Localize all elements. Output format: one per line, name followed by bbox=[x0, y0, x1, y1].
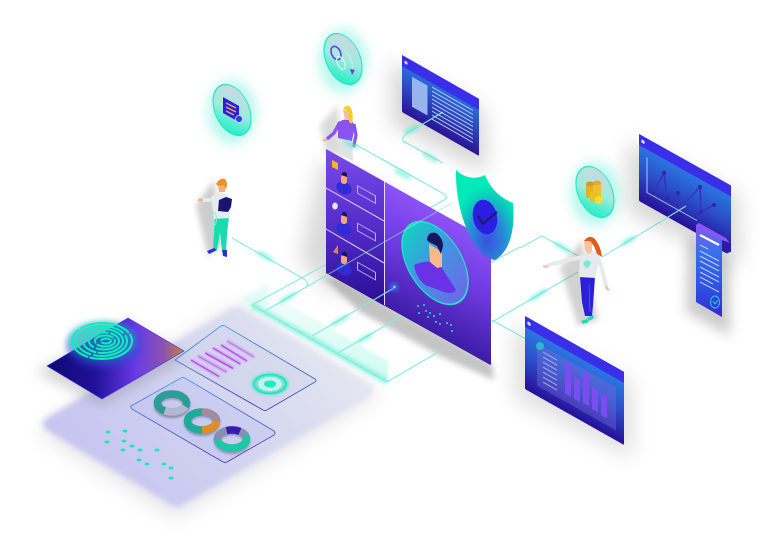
person: man with tablet bbox=[196, 179, 232, 257]
screen: bar chart bbox=[514, 316, 632, 458]
donut 2 bbox=[188, 412, 216, 432]
donut 3 bbox=[218, 430, 246, 450]
person: woman in purple bbox=[320, 105, 356, 161]
connector lines behind panels bbox=[232, 141, 680, 382]
screen: document bbox=[392, 55, 486, 172]
dividers bbox=[326, 181, 384, 305]
left list column bbox=[326, 149, 384, 306]
document receipt bbox=[686, 223, 730, 336]
bar screen node bbox=[536, 342, 544, 350]
glowing base strip bbox=[240, 284, 389, 382]
avatar dots bbox=[417, 304, 453, 332]
screen connector loop bbox=[403, 112, 443, 143]
list row people bbox=[334, 172, 354, 278]
fingerprint plate bbox=[36, 318, 188, 406]
fingerprint bbox=[66, 320, 142, 368]
profile avatar bbox=[402, 208, 468, 318]
bubble: certificate bbox=[208, 77, 256, 144]
soft shadow behind main panel bbox=[300, 160, 494, 380]
card: lines and target bbox=[175, 326, 316, 410]
donut 1 bbox=[158, 394, 186, 414]
bubble: coins bbox=[571, 159, 619, 226]
floor dots bbox=[104, 430, 174, 480]
card: donut charts bbox=[131, 378, 275, 462]
shield bbox=[456, 170, 514, 260]
screen: line chart bbox=[628, 134, 740, 266]
bubble: keys bbox=[319, 26, 367, 93]
connector lines over panel bbox=[312, 158, 452, 336]
person: woman in white bbox=[543, 237, 610, 326]
target bbox=[251, 372, 289, 396]
list row buttons bbox=[358, 186, 376, 280]
connector glow pulses bbox=[258, 126, 635, 342]
purple text lines bbox=[191, 341, 254, 377]
avatar person bbox=[414, 233, 456, 293]
main profile panel bbox=[326, 149, 491, 365]
panel node glow bbox=[387, 280, 401, 294]
floor platform bbox=[38, 306, 380, 518]
panel background bbox=[326, 149, 491, 365]
list row icons bbox=[332, 160, 338, 254]
